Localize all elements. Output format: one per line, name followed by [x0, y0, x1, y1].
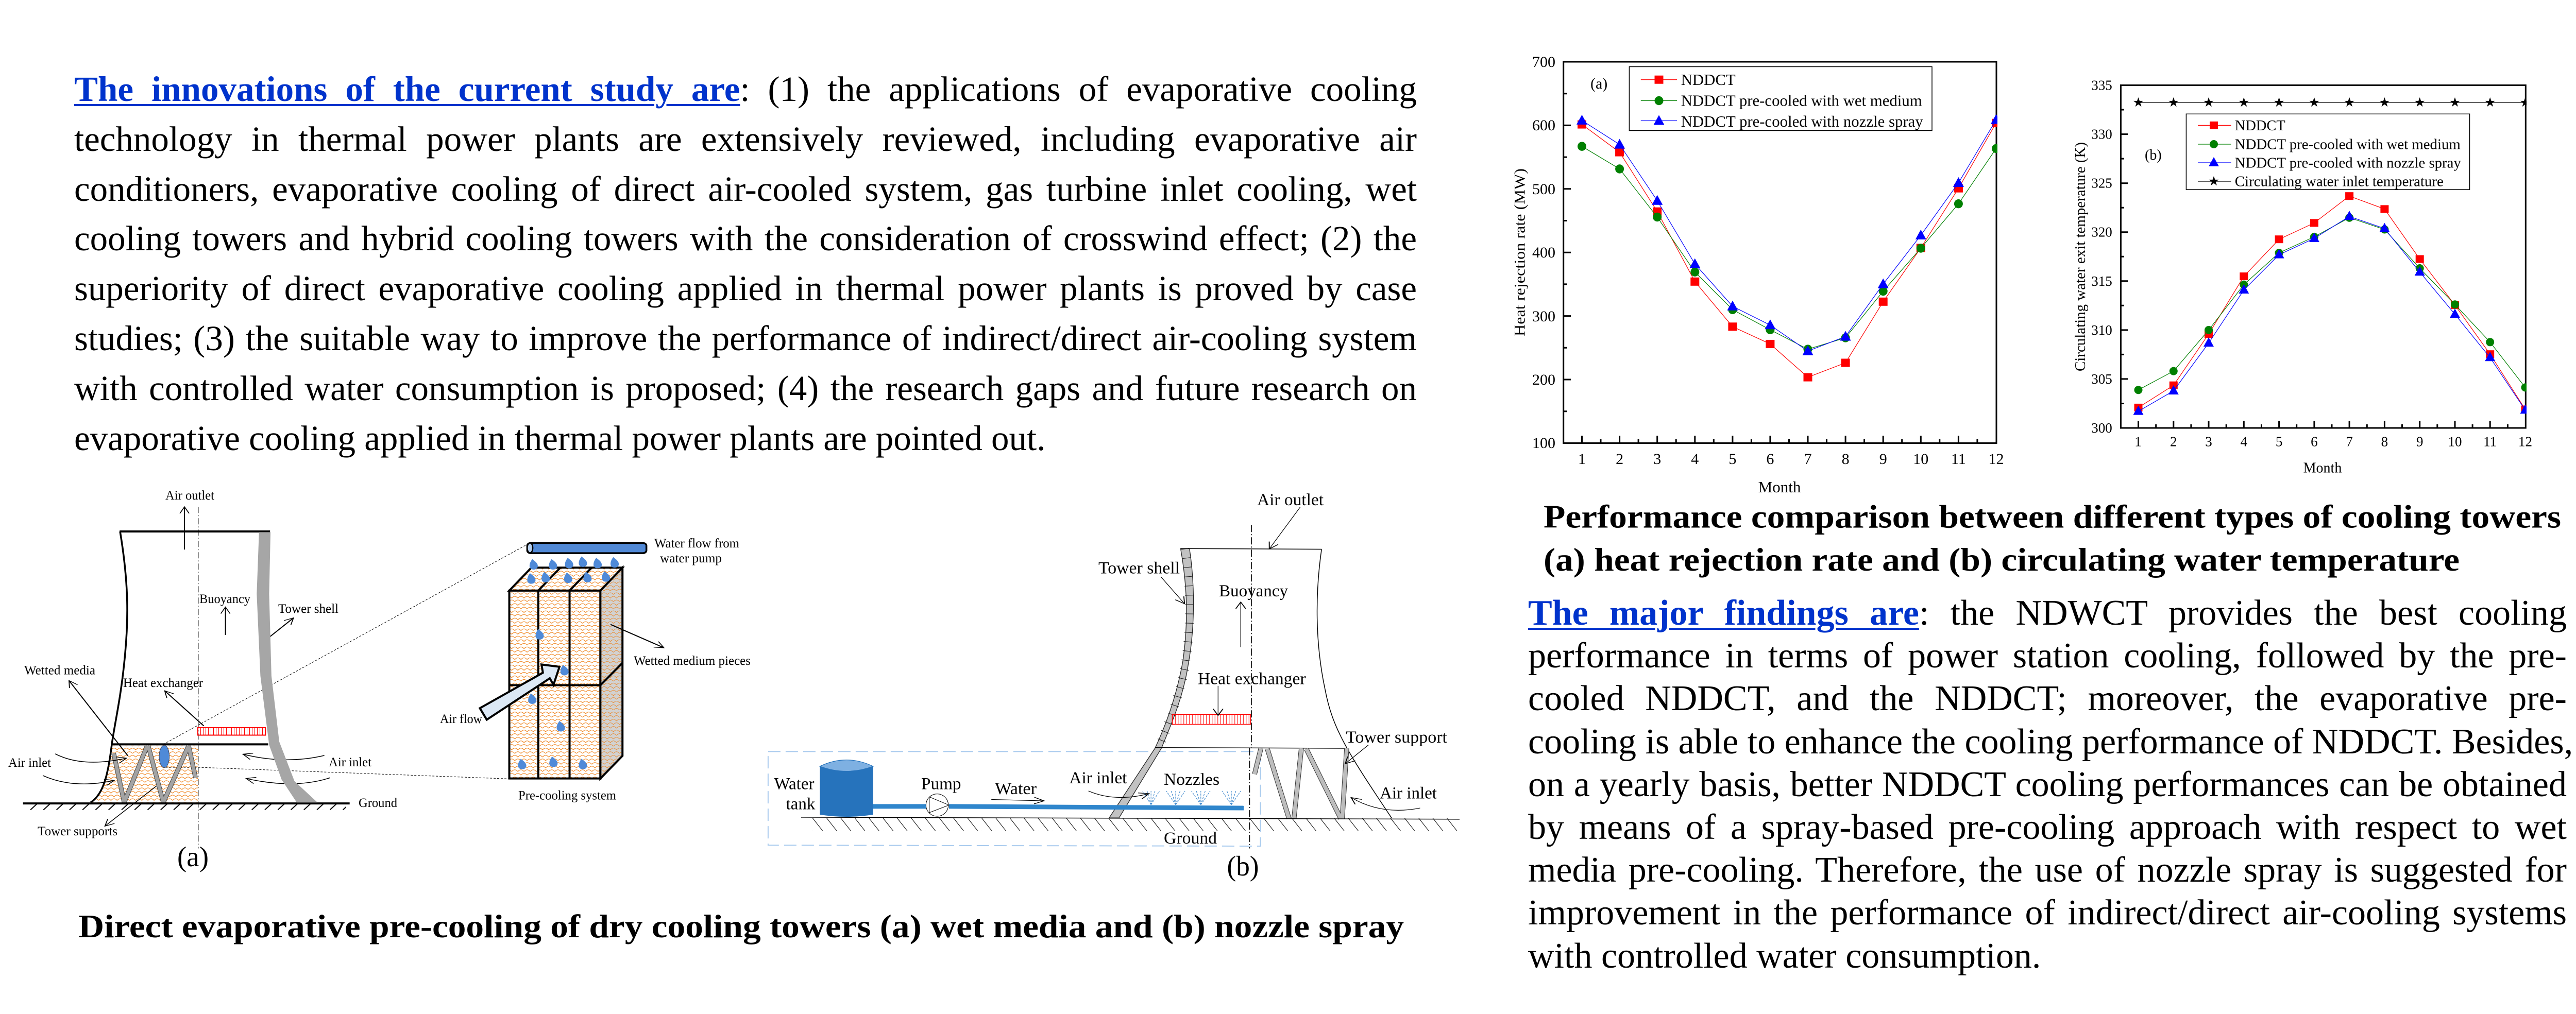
y axis labels: 600 — [1532, 117, 1555, 134]
label: (a): (a) — [177, 841, 209, 872]
y axis labels: 200 — [1532, 371, 1555, 388]
label: heat exchanger: Heat exchanger — [1198, 670, 1306, 689]
label: tower support: Tower support — [1346, 728, 1447, 747]
y axis labels: 300 — [2091, 420, 2112, 436]
x axis labels: 8 — [2381, 434, 2388, 450]
x axis labels: 3 — [1653, 451, 1661, 468]
y axis labels: 335 — [2091, 77, 2112, 93]
label: air inlet right: Air inlet — [329, 755, 371, 769]
y axis labels: 305 — [2091, 371, 2112, 387]
y axis labels: 310 — [2091, 322, 2112, 338]
chart: heat rejection rate by month — [1512, 54, 2004, 496]
series: NDDCT wet medium — [2138, 218, 2526, 390]
label: buoyancy: Buoyancy — [1219, 582, 1288, 600]
y axis labels — [2091, 77, 2112, 436]
label: heat exchanger: Heat exchanger — [123, 676, 204, 690]
panel: innovations text block: evaporative cooling applied in thermal power plants are pointed out. — [74, 419, 1045, 458]
panel: innovations text block: conditioners, evaporative cooling of direct air-cooled system, gas turbine inlet cooling, wet — [74, 169, 1417, 209]
x axis labels: 5 — [1728, 451, 1736, 468]
label: pre-cooling system: Pre-cooling system — [518, 789, 617, 802]
legend: NDDCT — [1681, 71, 1736, 89]
panel: innovations text block: with controlled water consumption is proposed; (4) the research gaps and future research on — [74, 369, 1417, 408]
label: air inlet left: Air inlet — [8, 756, 51, 770]
panel: major findings text block: The major findings are: the NDWCT provides the best cooling — [1528, 593, 2567, 633]
x axis labels: 12 — [1989, 451, 2004, 468]
y axis labels: 320 — [2091, 225, 2112, 240]
x axis labels: 6 — [2311, 434, 2318, 450]
x axis labels — [2134, 434, 2532, 450]
caption: performance comparison: (a) heat rejection rate and (b) circulating water temperature — [1544, 541, 2460, 578]
label: water flow from water pump: Water flow from — [654, 537, 740, 551]
caption: performance comparison — [1544, 499, 2561, 578]
legend: NDDCT pre-cooled with nozzle spray — [1681, 112, 1923, 130]
x axis labels: 3 — [2205, 434, 2212, 450]
x axis labels: 10 — [2448, 434, 2462, 450]
label: water tank: tank — [786, 795, 816, 814]
label: air outlet: Air outlet — [1257, 491, 1324, 509]
label: ground: Ground — [359, 796, 397, 810]
panel: innovations text block: superiority of direct evaporative cooling applied in thermal power plants is proved by case — [74, 269, 1417, 308]
label: water tank: Water — [774, 775, 814, 794]
x axis labels: 2 — [1616, 451, 1623, 468]
y axis labels: 315 — [2091, 273, 2112, 289]
label: water: Water — [995, 780, 1037, 798]
series: NDDCT — [1582, 123, 1996, 377]
label: air inlet left: Air inlet — [1069, 769, 1127, 787]
x axis labels: 7 — [2346, 434, 2353, 450]
panel: major findings text block: cooled NDDCT, and the NDDCT; moreover, the evaporative pre- — [1528, 679, 2567, 718]
x axis labels: 1 — [2134, 434, 2142, 450]
panel: major findings text block — [1528, 593, 2573, 976]
x axis labels: 5 — [2276, 434, 2282, 450]
x axis labels: 1 — [1578, 451, 1586, 468]
x axis labels: 7 — [1804, 451, 1811, 468]
panel: innovations text block: technology in thermal power plants are extensively reviewed, including evaporative air — [74, 119, 1417, 159]
series: NDDCT nozzle spray — [2138, 216, 2526, 411]
legend — [2186, 114, 2470, 190]
panel: major findings text block: media pre-cooling. Therefore, the use of nozzle spray is suggested for — [1528, 850, 2567, 890]
y axis labels: 400 — [1532, 244, 1555, 261]
panel tag (b): (b) — [2145, 147, 2162, 163]
y axis labels: 700 — [1532, 54, 1555, 71]
x axis labels: 10 — [1913, 451, 1928, 468]
label: (b): (b) — [1227, 850, 1259, 882]
y axis labels: 100 — [1532, 435, 1555, 452]
label: air inlet right: Air inlet — [1380, 784, 1437, 803]
x axis labels — [1578, 451, 2004, 468]
panel tag (a): (a) — [1590, 75, 1607, 92]
panel: major findings text block: with controlled water consumption. — [1528, 936, 2041, 976]
x axis labels: 9 — [2416, 434, 2423, 450]
label: air flow: Air flow — [440, 712, 482, 726]
label: tower shell: Tower shell — [278, 602, 338, 616]
y axis labels: 500 — [1532, 181, 1555, 198]
label: air outlet: Air outlet — [165, 489, 214, 503]
panel: innovations text block: cooling towers and hybrid cooling towers with the consideration of crosswind effect; (2) the — [74, 219, 1417, 258]
diagram: tower with wet media pre-cooling (a) — [8, 489, 527, 872]
panel: innovations text block: The innovations of the current study are: (1) the applications of evaporative cooling — [74, 70, 1417, 109]
x axis labels: 2 — [2170, 434, 2177, 450]
label: pump: Pump — [921, 775, 961, 794]
label: tower shell: Tower shell — [1098, 559, 1180, 578]
y axis labels: 330 — [2091, 127, 2112, 142]
x axis labels: 4 — [2241, 434, 2248, 450]
y axis labels: 325 — [2091, 176, 2112, 191]
label: wetted medium pieces: Wetted medium pieces — [634, 654, 751, 668]
label: wetted media: Wetted media — [24, 663, 95, 678]
diagram: pre-cooling system block — [440, 537, 751, 802]
chart: circulating water exit temperature by month — [2073, 77, 2532, 476]
x axis title: Month — [2303, 460, 2342, 476]
series: NDDCT — [2138, 196, 2526, 409]
panel: major findings text block: cooling is able to enhance the cooling performance of NDDCT. Besides, — [1528, 722, 2573, 762]
series: circulating water inlet temperature — [2138, 102, 2526, 103]
series: NDDCT wet medium — [1582, 146, 1996, 349]
label: nozzles: Nozzles — [1164, 770, 1219, 789]
panel: major findings text block: performance in terms of power station cooling, followed by the pre- — [1528, 636, 2567, 676]
label: water pump: water pump — [660, 552, 722, 565]
x axis title: Month — [1758, 478, 1801, 496]
panel: innovations text block — [74, 70, 1417, 458]
x axis labels: 6 — [1766, 451, 1774, 468]
y axis title: Circulating water exit temperature (K) — [2073, 142, 2089, 371]
x axis labels: 9 — [1879, 451, 1887, 468]
legend: NDDCT pre-cooled with wet medium — [2235, 137, 2461, 153]
panel: major findings text block: on a yearly basis, better NDDCT cooling performances can be obtained — [1528, 765, 2567, 804]
caption: performance comparison: Performance comparison between different types of cooling towers — [1544, 499, 2561, 535]
legend: Circulating water inlet temperature — [2235, 174, 2444, 190]
panel: major findings text block: by means of a spray-based pre-cooling approach with respect to wet — [1528, 807, 2567, 847]
label: buoyancy: Buoyancy — [199, 592, 250, 606]
diagram: tower with nozzle spray pre-cooling (b) — [768, 491, 1460, 882]
y axis labels — [1532, 54, 1555, 452]
x axis labels: 11 — [1951, 451, 1966, 468]
label: tower supports: Tower supports — [38, 824, 117, 838]
legend: NDDCT pre-cooled with wet medium — [1681, 92, 1922, 110]
x axis labels: 12 — [2518, 434, 2532, 450]
y axis title: Heat rejection rate (MW) — [1512, 168, 1529, 336]
x axis labels: 8 — [1842, 451, 1850, 468]
legend — [1629, 67, 1932, 131]
series: NDDCT nozzle spray — [1582, 120, 1996, 351]
y axis labels: 300 — [1532, 308, 1555, 325]
legend: NDDCT pre-cooled with nozzle spray — [2235, 156, 2461, 171]
panel: major findings text block: improvement in the performance of indirect/direct air-cooling systems — [1528, 893, 2567, 933]
x axis labels: 4 — [1691, 451, 1699, 468]
legend: NDDCT — [2235, 118, 2285, 134]
panel: innovations text block: studies; (3) the suitable way to improve the performance of indirect/direct air-cooling system — [74, 319, 1417, 358]
x axis labels: 11 — [2483, 434, 2497, 450]
caption: direct evaporative pre-cooling: Direct evaporative pre-cooling of dry cooling towers (a) wet media and (b) nozzle spray — [78, 908, 1404, 944]
label: ground: Ground — [1164, 829, 1217, 848]
